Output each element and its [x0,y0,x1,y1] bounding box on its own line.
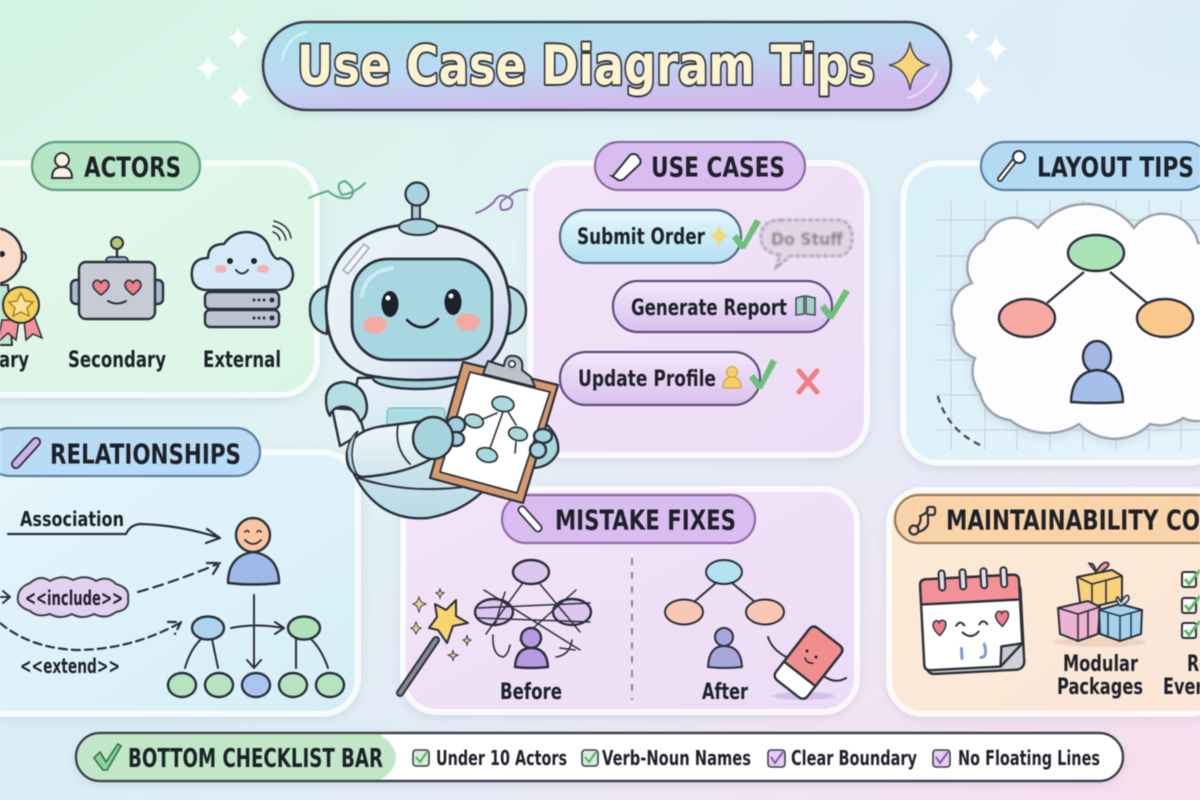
use case: submit order: Submit Order [577,225,705,250]
actors heading pill [32,142,200,190]
visor [352,259,492,360]
mouth [407,319,438,327]
association label: Association [20,507,124,531]
relationships heading pill [0,428,260,476]
bar heading: BOTTOM CHECKLIST BAR [128,744,383,774]
icon: calendar [919,566,1025,674]
scalloped cloud frame [952,204,1200,439]
modular packages label: Packages [1057,675,1143,700]
head highlight [343,244,369,274]
title text: Use Case Diagram Tips [297,34,875,97]
robot right fingers [530,429,552,458]
cheeks [363,316,387,334]
mistake fixes heading pill [502,495,755,543]
external actor: cloud server icon [192,221,293,327]
robot right hand behind clipboard [532,423,558,468]
robot left arm [326,382,436,477]
checklist item: under 10 actors: Under 10 Actors [436,746,567,770]
purple squiggle connector [476,190,530,213]
divider [631,558,633,700]
use case: generate report: Generate Report [631,296,787,321]
panel: layout tips [903,142,1200,463]
icon: red x [799,371,817,392]
actors heading pill: ACTORS [84,150,181,184]
green squiggle connector [309,181,365,198]
panel: actors [0,142,317,395]
icon: magic wand [400,589,471,693]
after label: After [702,680,748,705]
sparkles: left of title [196,26,251,110]
modular packages label [1057,652,1143,700]
checklist item: verb-noun names: Verb-Noun Names [602,746,751,770]
include dashed arrow [138,563,220,592]
robot mascot [310,182,558,518]
review label [1163,652,1200,700]
association arrow [8,524,220,543]
mistake fixes heading pill: MISTAKE FIXES [555,504,736,536]
checklist item: clear boundary [768,746,917,770]
checklist item: no floating lines [933,746,1100,770]
clipboard mini diagram [463,395,529,464]
layout tips heading pill [981,142,1200,190]
checklist item: clear boundary: Clear Boundary [791,746,917,770]
include bubble: <<include>> [25,586,123,610]
background grid [935,200,1200,450]
robot head [326,182,510,380]
bottom checklist bar [76,733,1123,781]
antenna [399,182,437,235]
use case: submit order [560,210,761,263]
actor figure [228,518,279,584]
after: clean diagram [665,560,784,668]
left arrow stub [0,591,10,603]
use case tree [168,595,344,697]
external label: External [203,348,281,373]
extend label: <<extend>> [20,654,120,678]
use case: update profile: Update Profile [578,367,716,392]
extend dashed arrow [0,622,181,650]
before label: Before [500,680,562,705]
callout: do stuff (blurred): Do Stuff [771,230,843,250]
icon: big check [94,744,121,770]
primary actor icon [0,228,42,345]
checklist item: under 10 actors [413,746,567,770]
checklist item: verb-noun names [582,746,751,770]
layout diagram [999,235,1193,403]
checklist item: no floating lines: No Floating Lines [958,746,1100,770]
before: tangled diagram [475,560,591,668]
sparkles: right of title [964,28,1008,106]
use case: generate report [613,281,850,332]
eyes [382,291,398,317]
use cases heading pill [595,142,805,190]
dashed arc note [938,397,980,445]
secondary actor: robot icon [71,237,163,319]
icon: gift boxes [1054,562,1146,647]
include bubble [18,577,128,617]
robot left hand [413,417,465,459]
use case: update profile [560,352,777,405]
icon: eraser character [768,624,846,701]
callout: do stuff (blurred) [761,220,852,268]
secondary label: Secondary [68,348,166,373]
clipboard clip [483,356,535,387]
robot body [350,367,504,518]
panel: mistake fixes [400,489,857,712]
icon: review checklist [1182,570,1200,638]
relationships heading pill: RELATIONSHIPS [50,438,241,470]
icon: gold sparkle [889,42,930,90]
panel: relationships [0,428,358,714]
use cases heading pill: USE CASES [651,150,785,184]
panel: use cases [530,142,867,455]
title banner [263,22,951,110]
modular packages label: Modular [1063,652,1138,677]
clipboard [430,356,558,503]
robot ears [310,286,526,334]
maintainability heading pill [895,495,1200,543]
panel: maintainability [889,490,1200,714]
